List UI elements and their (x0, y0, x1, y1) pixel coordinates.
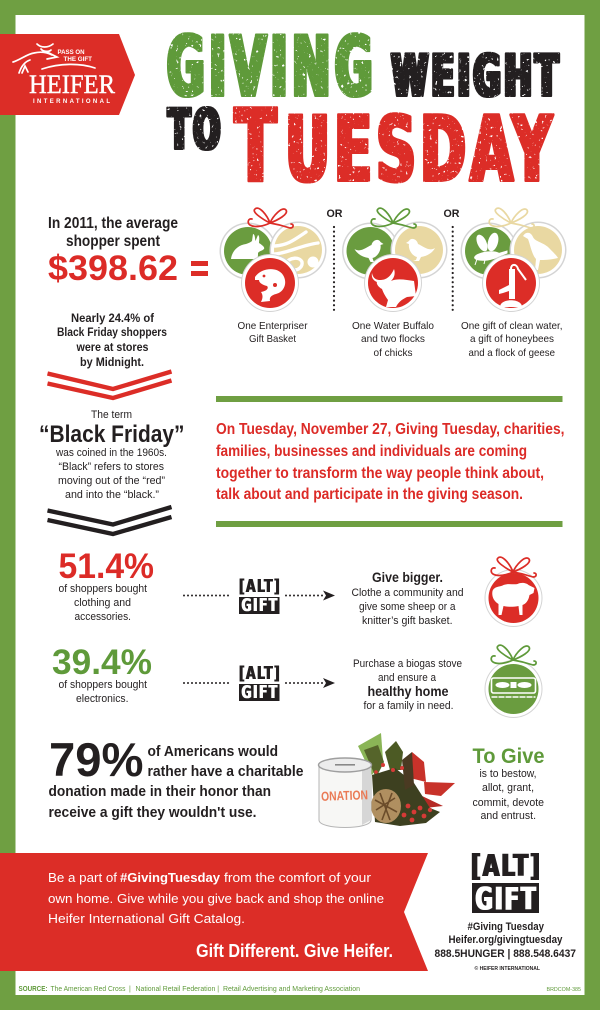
text: biogas stove: healthy home (368, 683, 449, 699)
stat: 79% of Americans: receive a gift they wouldn't use. (48, 804, 256, 821)
text: give bigger: knitter’s gift basket. (362, 615, 452, 627)
logo: Heifer International tag: THE GIFT (64, 56, 92, 63)
captions under ornaments: One Water Buffalo (352, 320, 434, 332)
icon: red ribbon bow (491, 557, 536, 577)
divider: dotted OR 1 (326, 208, 343, 310)
logo: alt gift row 2: [ALT] (239, 663, 281, 684)
text: To Give definition: and entrust. (480, 810, 536, 822)
icon: red chevrons (48, 372, 172, 398)
icon: water pump (499, 265, 526, 307)
panel: Giving Tuesday statement: talk about and participate in the giving season. (216, 486, 523, 503)
text: biogas stove: for a family in need. (364, 700, 454, 712)
stat: 39.4% electronics: 39.4% (52, 643, 152, 682)
text: the term Black Friday: “Black Friday” (39, 421, 184, 448)
logo: alt gift large: [ALT] (471, 849, 542, 884)
text: sources: The American Red Cross (50, 986, 126, 993)
banner: call to action: own home. Give while you give back and shop the online (48, 891, 384, 906)
text: sources: Retail Advertising and Marketing Association (223, 986, 360, 993)
text: contact details: 888.5HUNGER | 888.548.6437 (434, 948, 576, 960)
text: To Give definition (472, 745, 544, 822)
icon: honeybee (474, 232, 507, 265)
stat: average shopper spent: $398.62 (48, 249, 178, 288)
text: contact details: © HEIFER INTERNATIONAL (474, 965, 540, 972)
logo: alt gift large: GIFT (476, 882, 538, 918)
stat: 51.4% clothing (58, 547, 154, 623)
stat: 51.4% clothing: clothing and (74, 597, 131, 609)
stat: 79% of Americans: 79% (49, 733, 144, 786)
text: Black Friday shoppers at midnight: by Midnight. (80, 355, 144, 369)
icon: water buffalo (372, 269, 416, 307)
text: biogas stove: Purchase a biogas stove (353, 658, 462, 670)
icon: red ribbon bow (248, 208, 293, 228)
title: Giving Weight to Tuesday: GIVING (167, 18, 377, 116)
text: give bigger: Clothe a community and (352, 587, 464, 599)
arrow: clothing to alt gift (184, 590, 335, 600)
logo: alt gift row 1: GIFT (242, 595, 278, 616)
logo: alt gift row 1: [ALT] (239, 576, 281, 597)
text: contact details: Heifer.org/givingtuesday (448, 934, 563, 946)
icon: fish (255, 269, 285, 302)
icon: black chevrons (48, 507, 172, 534)
logo: alt gift large (471, 849, 542, 918)
banner: call to action: Heifer International Gift Catalog. (48, 911, 245, 926)
banner: call to action (0, 853, 428, 971)
icon: stove (492, 678, 536, 697)
text: the term Black Friday: “Black” refers to stores (58, 461, 164, 473)
captions under ornaments: Gift Basket (249, 333, 296, 345)
icon: fibre swirls (275, 232, 318, 270)
illustration: donation can (318, 758, 372, 828)
banner: call to action: Gift Different. Give Heifer. (196, 941, 393, 961)
logo: alt gift row 1 (239, 576, 281, 616)
ornaments: clean water, honeybees, geese (460, 208, 566, 312)
icon: rabbit (231, 234, 264, 259)
divider: dotted OR 1: OR (326, 208, 343, 220)
icon: goose (523, 233, 558, 270)
text: Black Friday shoppers at midnight: were at stores (76, 340, 149, 354)
banner: call to action: from the comfort of your (224, 870, 372, 885)
stat: average shopper spent (48, 215, 208, 288)
text: To Give definition: allot, grant, (482, 782, 534, 794)
title: Giving Weight to Tuesday: T (235, 88, 276, 204)
stat: 79% of Americans: donation made in their honor than (48, 783, 271, 800)
stat: 51.4% clothing: 51.4% (58, 547, 154, 586)
title: Giving Weight to Tuesday (167, 18, 562, 204)
text: the term Black Friday: and into the “black.” (65, 489, 159, 501)
logo: alt gift row 2: GIFT (242, 682, 278, 703)
text: To Give definition: is to bestow, (480, 768, 536, 780)
stat: 79% of Americans: of Americans would (148, 743, 278, 760)
title: Giving Weight to Tuesday: TO (168, 98, 224, 162)
icon: chick green (354, 240, 384, 262)
captions under ornaments (238, 320, 562, 359)
icon: green ribbon bow (371, 208, 416, 228)
text: Black Friday shoppers at midnight: Nearly 24.4% of (71, 311, 155, 325)
stat: 79% of Americans (48, 733, 304, 821)
stat: 51.4% clothing: of shoppers bought (58, 583, 147, 595)
captions under ornaments: a gift of honeybees (470, 333, 554, 345)
icon: beige ribbon bow (489, 208, 534, 228)
text: the term Black Friday (39, 409, 184, 501)
text: contact details (434, 921, 576, 972)
text: sources: National Retail Federation | (136, 986, 219, 993)
text: Black Friday shoppers at midnight (57, 311, 167, 369)
logo: Heifer International tag: HEIFER (29, 70, 116, 99)
captions under ornaments: One gift of clean water, (461, 320, 562, 332)
ornaments: Water Buffalo and chicks (342, 208, 448, 312)
panel: Giving Tuesday statement: families, businesses and individuals are coming (216, 443, 527, 460)
text: the term Black Friday: was coined in the 1960s. (55, 447, 167, 459)
logo: Heifer International tag (0, 34, 135, 115)
text: sources: | (129, 986, 131, 993)
captions under ornaments: of chicks (374, 347, 412, 359)
text: Black Friday shoppers at midnight: Black Friday shoppers (57, 325, 167, 339)
icon: sheep (492, 583, 534, 615)
stat: average shopper spent: In 2011, the average (48, 215, 178, 232)
text: sources: BRDCOM-385 (546, 987, 581, 993)
text: the term Black Friday: moving out of the “red” (58, 475, 165, 487)
text: the term Black Friday: The term (91, 409, 132, 421)
text: give bigger (352, 570, 464, 627)
ornament: biogas stove (484, 645, 542, 718)
banner: call to action: Be a part of (48, 870, 117, 885)
text: give bigger: Give bigger. (372, 570, 443, 585)
stat: 39.4% electronics (52, 643, 152, 705)
text: To Give definition: To Give (472, 745, 544, 768)
text: To Give definition: commit, devote (472, 797, 544, 809)
icon: green ribbon bow (491, 645, 536, 665)
captions under ornaments: and two flocks (361, 333, 425, 345)
logo: alt gift row 2 (239, 663, 281, 703)
stat: average shopper spent: shopper spent (66, 233, 160, 250)
icon: chick beige (406, 239, 435, 261)
illustration: foliage and berries (358, 733, 455, 826)
stat: 79% of Americans: rather have a charitable (148, 763, 304, 780)
text: sources (18, 986, 581, 993)
panel: Giving Tuesday statement: together to transform the way people think about, (216, 465, 544, 482)
captions under ornaments: One Enterpriser (238, 320, 308, 332)
stat: 51.4% clothing: accessories. (74, 611, 131, 623)
panel: Giving Tuesday statement (216, 396, 564, 527)
text: biogas stove (353, 658, 462, 712)
illustration: donation can: ONATION (321, 787, 368, 804)
text: contact details: #Giving Tuesday (468, 921, 545, 933)
divider: dotted OR 2 (444, 208, 460, 310)
divider: dotted OR 2: OR (444, 208, 460, 220)
arrow: electronics to alt gift (184, 678, 335, 688)
text: sources: SOURCE: (18, 986, 48, 993)
logo: Heifer International tag: PASS ON (58, 49, 85, 56)
panel: Giving Tuesday statement: On Tuesday, November 27, Giving Tuesday, charities, (216, 421, 564, 438)
stat: 39.4% electronics: of shoppers bought (58, 679, 147, 691)
text: biogas stove: and ensure a (378, 672, 437, 684)
ornaments: Enterpriser Gift Basket (220, 208, 326, 312)
logo: Heifer International tag: INTERNATIONAL (33, 99, 110, 105)
ornament: sheep (484, 557, 542, 627)
captions under ornaments: and a flock of geese (468, 347, 555, 359)
text: give bigger: give some sheep or a (359, 601, 456, 613)
banner: call to action: #GivingTuesday (120, 870, 221, 885)
stat: 39.4% electronics: electronics. (76, 693, 128, 705)
